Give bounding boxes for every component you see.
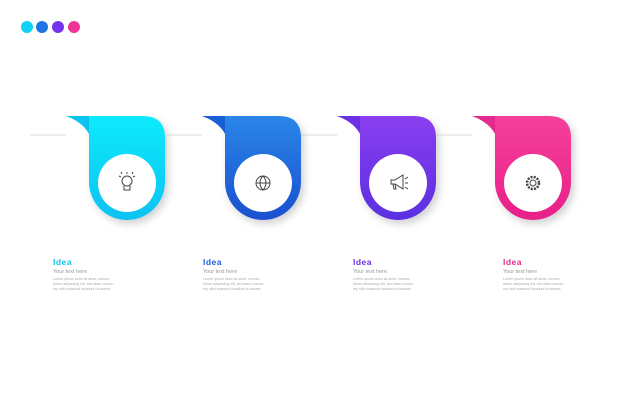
- text 4: [503, 257, 564, 291]
- card 2: [166, 116, 301, 220]
- text 3: Idea: [353, 257, 372, 267]
- text 3: tetuer adipiscing elit, sed diam nonum: [353, 282, 413, 286]
- text 1: Your text here: [53, 269, 87, 275]
- color dots: [21, 21, 80, 33]
- text 1: Lorem ipsum dolor sit amet, consec: [53, 277, 110, 281]
- text 4: Your text here: [503, 269, 537, 275]
- text 2: Lorem ipsum dolor sit amet, consec: [203, 277, 260, 281]
- text 2: [203, 257, 264, 291]
- text 4: tetuer adipiscing elit, sed diam nonum: [503, 282, 563, 286]
- card 3: [301, 116, 436, 220]
- text 4: my nibh euismod tincidunt ut laoreet: [503, 287, 561, 291]
- text 3: my nibh euismod tincidunt ut laoreet: [353, 287, 411, 291]
- card 4: [436, 116, 571, 220]
- card 1: [30, 116, 165, 220]
- text 2: tetuer adipiscing elit, sed diam nonum: [203, 282, 263, 286]
- text 2: Idea: [203, 257, 222, 267]
- text 1: Idea: [53, 257, 72, 267]
- text 1: [53, 257, 114, 291]
- text 3: Lorem ipsum dolor sit amet, consec: [353, 277, 410, 281]
- text 2: my nibh euismod tincidunt ut laoreet: [203, 287, 261, 291]
- text 1: tetuer adipiscing elit, sed diam nonum: [53, 282, 113, 286]
- text 4: Lorem ipsum dolor sit amet, consec: [503, 277, 560, 281]
- text 1: my nibh euismod tincidunt ut laoreet: [53, 287, 111, 291]
- text 3: Your text here: [353, 269, 387, 275]
- text 3: [353, 257, 414, 291]
- text 2: Your text here: [203, 269, 237, 275]
- text 4: Idea: [503, 257, 522, 267]
